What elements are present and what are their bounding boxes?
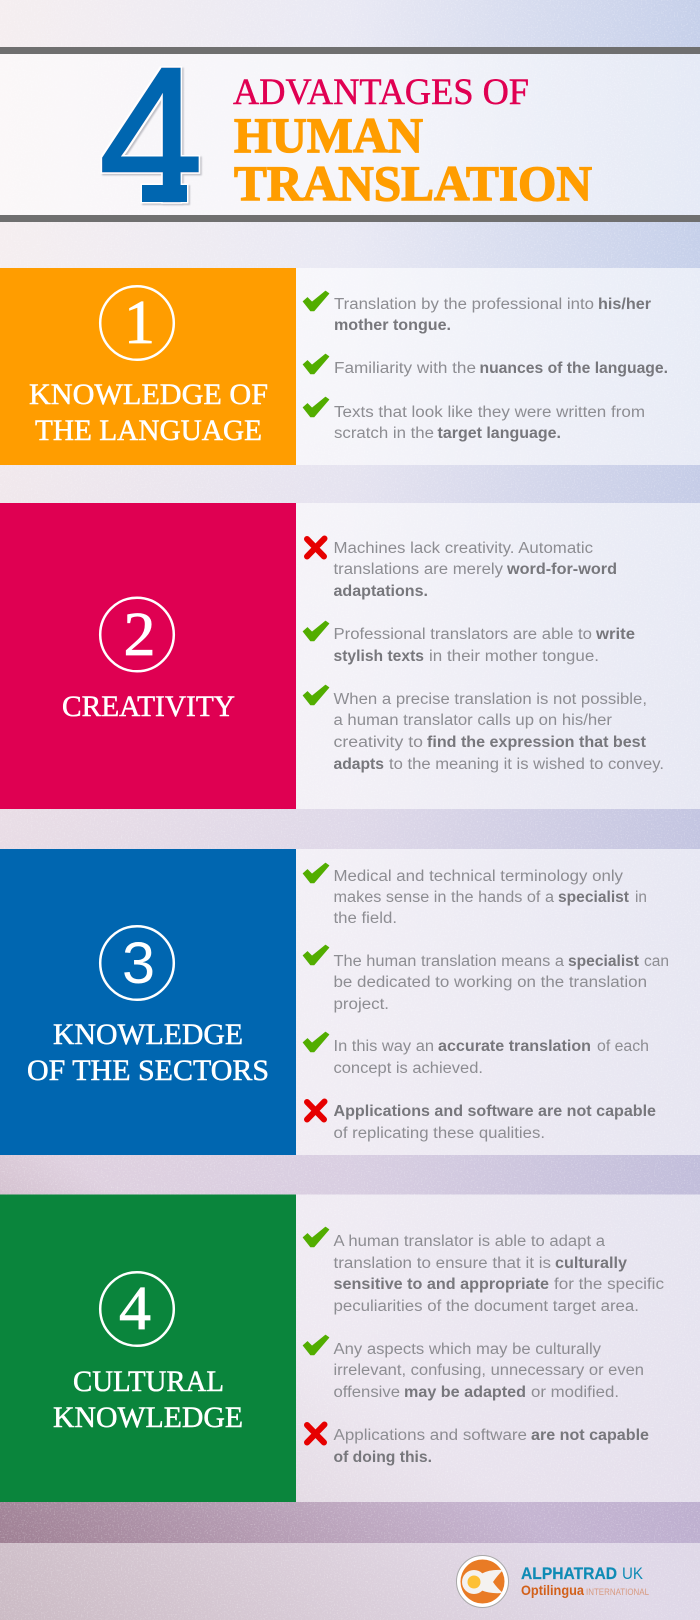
footer band — [0, 1543, 700, 1620]
bullet 3.1: makes sense in the hands of a — [334, 889, 554, 906]
bullet 2.1: Machines lack creativity. Automatic — [334, 540, 593, 557]
label block 1: THE LANGUAGE — [35, 414, 262, 447]
bullet 3.2: project. — [334, 996, 389, 1013]
bullet 2.2: stylish texts — [334, 648, 424, 665]
panel 1: knowledge of the language — [0, 268, 700, 465]
bullet 2.3: find the expression that best — [427, 734, 646, 751]
logo wordmark — [521, 1564, 649, 1598]
bullet 3.2: The human translation means a — [334, 953, 564, 970]
title — [233, 72, 592, 211]
title: HUMAN — [234, 107, 423, 163]
bullet 3.3: concept is achieved. — [334, 1060, 483, 1077]
bullet 1.2 — [303, 354, 668, 377]
label block 3 — [0, 849, 296, 1155]
bullet 2.3: When a precise translation is not possible, — [334, 691, 647, 708]
bullet 4.1: A human translator is able to adapt a — [334, 1233, 605, 1250]
logo wordmark: Optilingua — [521, 1582, 584, 1598]
bullet 1.3: scratch in the — [334, 425, 434, 442]
bullet 4.3: are not capable — [531, 1427, 649, 1444]
title: TRANSLATION — [234, 155, 592, 211]
bullet 4.2: offensive — [334, 1384, 400, 1401]
bullet 2.2 — [303, 621, 635, 665]
bullet 1.1: mother tongue. — [334, 317, 451, 334]
bullet 2.1: adaptations. — [334, 583, 428, 600]
bullet 3.1 — [303, 863, 647, 927]
label block 2: CREATIVITY — [62, 690, 235, 723]
bullet 2.2: Professional translators are able to — [334, 626, 592, 643]
bullet 2.3: adapts — [334, 756, 384, 773]
bullet 2.2: in their mother tongue. — [429, 648, 599, 665]
bullet 3.3 — [303, 1032, 649, 1077]
panel 4: cultural knowledge — [0, 1194, 700, 1502]
label block 4 — [0, 1194, 296, 1502]
bullet 1.3: target language. — [438, 425, 561, 442]
bullet 3.2: can — [644, 953, 669, 970]
label block 4: CULTURAL — [73, 1365, 224, 1398]
bullet 3.4: of replicating these qualities. — [334, 1125, 545, 1142]
bullet 1.2: Familiarity with the — [334, 360, 476, 377]
bullet 4.1: translation to ensure that it is — [334, 1255, 551, 1272]
bullet 3.2: specialist — [568, 953, 639, 970]
label block 4: 4 — [119, 1275, 151, 1343]
logo: Alphatrad UK — [456, 1556, 649, 1608]
bullet 4.2 — [303, 1335, 644, 1401]
label block 1 — [0, 268, 296, 465]
label block 3: 3 — [122, 931, 155, 996]
bullet 1.3: Texts that look like they were written from — [334, 404, 645, 421]
bullet 3.4: Applications and software are not capable — [334, 1103, 656, 1120]
bullet 2.1: word-for-word — [506, 561, 617, 578]
logo wordmark: INTERNATIONAL — [586, 1587, 649, 1597]
bullet 4.2: Any aspects which may be culturally — [334, 1341, 601, 1358]
bullet 3.3: In this way an — [334, 1038, 434, 1055]
bullet 4.3: Applications and software — [334, 1427, 527, 1444]
bullet 1.1: Translation by the professional into — [334, 296, 594, 313]
bullet 1.1: his/her — [598, 296, 651, 313]
panel 3: knowledge of the sectors — [0, 849, 700, 1155]
label block 3: KNOWLEDGE — [53, 1018, 243, 1051]
bullet 4.2: or modified. — [531, 1384, 619, 1401]
panel 2: creativity — [0, 503, 700, 809]
bullet 3.1: in — [635, 889, 647, 906]
bullet 3.2 — [303, 945, 669, 1013]
label block 2: 2 — [124, 601, 156, 669]
bullet 4.1: culturally — [555, 1255, 627, 1272]
logo wordmark: ALPHATRAD — [521, 1564, 617, 1583]
bullet 2.3 — [303, 685, 664, 773]
bullet 1.3 — [303, 397, 645, 442]
bullet 2.1 — [307, 538, 617, 600]
label block 1: KNOWLEDGE OF — [29, 378, 268, 411]
bullet 2.3: a human translator calls up on his/her — [334, 712, 612, 729]
bullet 4.2: irrelevant, confusing, unnecessary or even — [334, 1362, 644, 1379]
bullet 4.1: sensitive to and appropriate — [334, 1276, 549, 1293]
label block 4: KNOWLEDGE — [53, 1401, 243, 1434]
label block 2 — [0, 503, 296, 809]
bullet 4.1: for the specific — [554, 1276, 664, 1293]
bullet 2.2: write — [595, 626, 635, 643]
bullet 3.1: specialist — [558, 889, 629, 906]
title: ADVANTAGES OF — [233, 72, 529, 113]
bullet 3.3: accurate translation — [438, 1038, 591, 1055]
logo wordmark: UK — [622, 1564, 644, 1583]
big number 4: 4 — [99, 27, 203, 242]
bullet 2.3: to the meaning it is wished to convey. — [389, 756, 664, 773]
bullet 4.1 — [303, 1227, 664, 1315]
header band — [0, 27, 700, 242]
bullet 4.2: may be adapted — [404, 1384, 526, 1401]
bullet 3.3: of each — [597, 1038, 649, 1055]
bullet 1.1 — [303, 291, 651, 334]
bullet 1.2: nuances of the language. — [480, 360, 668, 377]
bullet 3.2: be dedicated to working on the translation — [334, 974, 647, 991]
bullet 3.1: Medical and technical terminology only — [334, 868, 623, 885]
bullet 2.3: creativity to — [334, 734, 423, 751]
logo emblem — [456, 1556, 508, 1608]
bullet 2.1: translations are merely — [334, 561, 503, 578]
label block 1: 1 — [124, 289, 155, 357]
bullet 4.3 — [307, 1424, 649, 1466]
label block 3: OF THE SECTORS — [27, 1054, 269, 1087]
bullet 4.3: of doing this. — [334, 1449, 432, 1466]
bullet 4.1: peculiarities of the document target area. — [334, 1298, 639, 1315]
bullet 3.4 — [307, 1102, 656, 1142]
bullet 3.1: the field. — [334, 910, 397, 927]
